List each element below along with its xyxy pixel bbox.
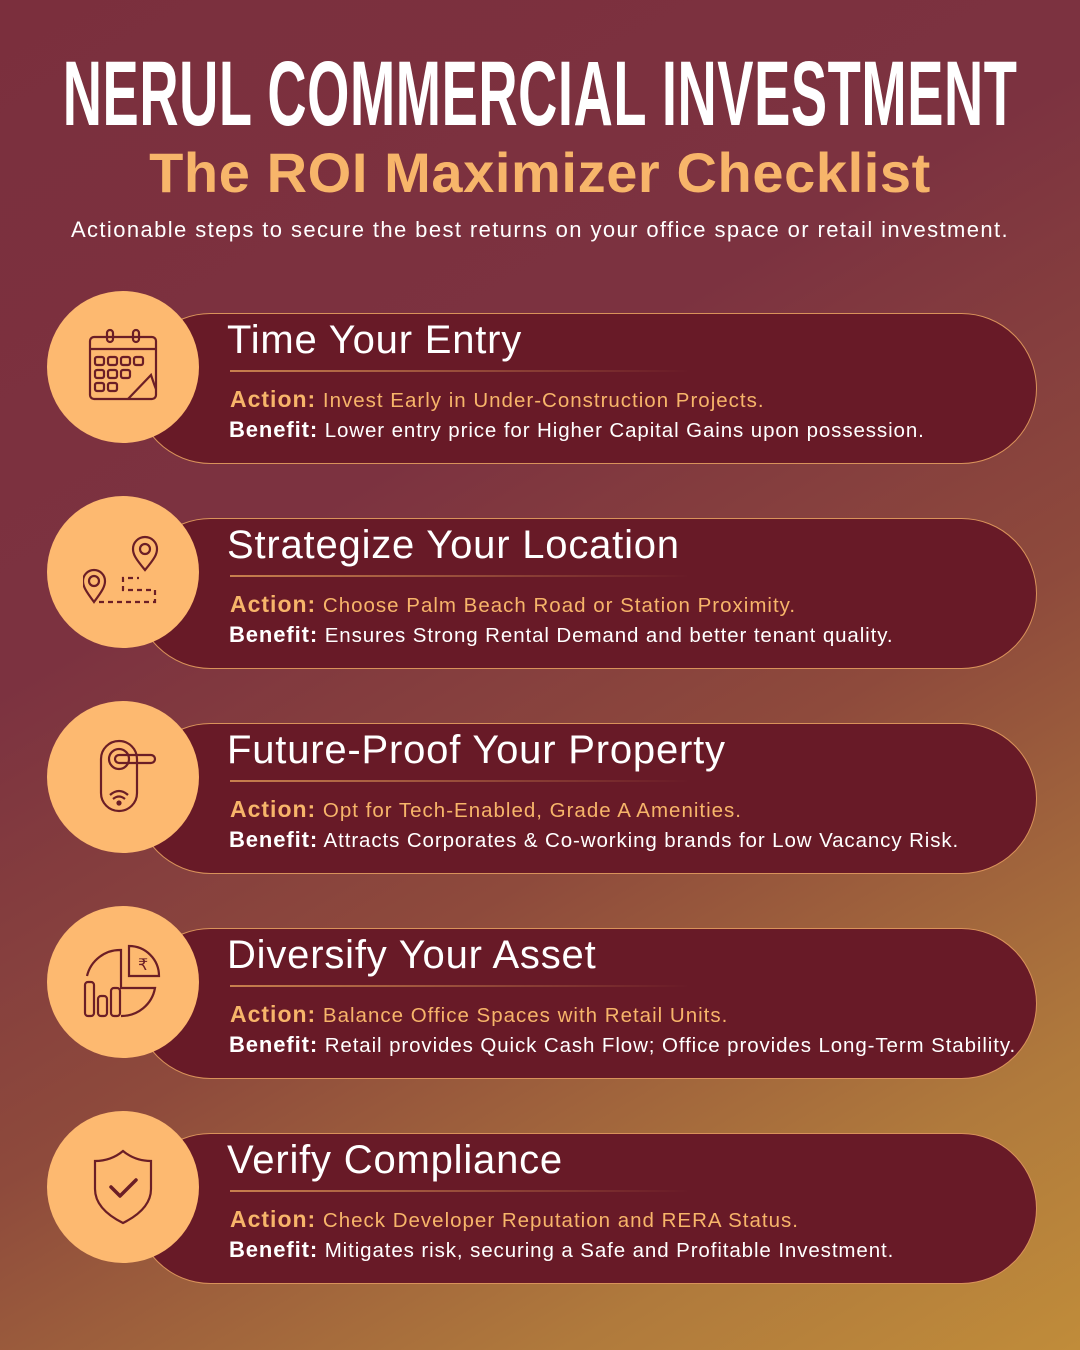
icon: chart: ₹ <box>138 955 148 974</box>
panel: location <box>47 496 1037 669</box>
action text: Action: Choose Palm Beach Road or Station Proximity. <box>230 591 796 617</box>
title: NERUL COMMERCIAL INVESTMENT <box>63 43 1017 145</box>
benefit text: Benefit: Ensures Strong Rental Demand and better tenant quality. <box>229 622 893 647</box>
icon: calendar <box>47 291 199 443</box>
subtitle: The ROI Maximizer Checklist <box>149 141 931 204</box>
benefit text: Benefit: Retail provides Quick Cash Flow; Office provides Long-Term Stability. <box>229 1032 1016 1057</box>
panel: compliance <box>47 1111 1037 1284</box>
action text: Action: Balance Office Spaces with Retail Units. <box>230 1001 728 1027</box>
action text: Action: Opt for Tech-Enabled, Grade A Amenities. <box>230 796 742 822</box>
benefit text: Benefit: Lower entry price for Higher Capital Gains upon possession. <box>229 417 925 442</box>
heading: Strategize Your Location <box>227 523 680 567</box>
action text: Action: Invest Early in Under-Construction Projects. <box>230 386 765 412</box>
panel: future-proof <box>47 701 1037 874</box>
tagline: Actionable steps to secure the best returns on your office space or retail investment. <box>71 217 1009 242</box>
icon: smart door lock <box>47 701 199 853</box>
action text: Action: Check Developer Reputation and RERA Status. <box>230 1206 799 1232</box>
icon: shield check <box>47 1111 199 1263</box>
benefit text: Benefit: Attracts Corporates & Co-working brands for Low Vacancy Risk. <box>229 827 959 852</box>
heading: Diversify Your Asset <box>227 933 596 977</box>
panel: time your entry <box>47 291 1037 464</box>
benefit text: Benefit: Mitigates risk, securing a Safe and Profitable Investment. <box>229 1237 894 1262</box>
icon: location pins <box>47 496 199 648</box>
heading: Verify Compliance <box>227 1138 563 1182</box>
icon: chart <box>47 906 199 1058</box>
heading: Time Your Entry <box>227 318 522 362</box>
heading: Future-Proof Your Property <box>227 728 726 772</box>
panel: diversify <box>47 906 1037 1079</box>
